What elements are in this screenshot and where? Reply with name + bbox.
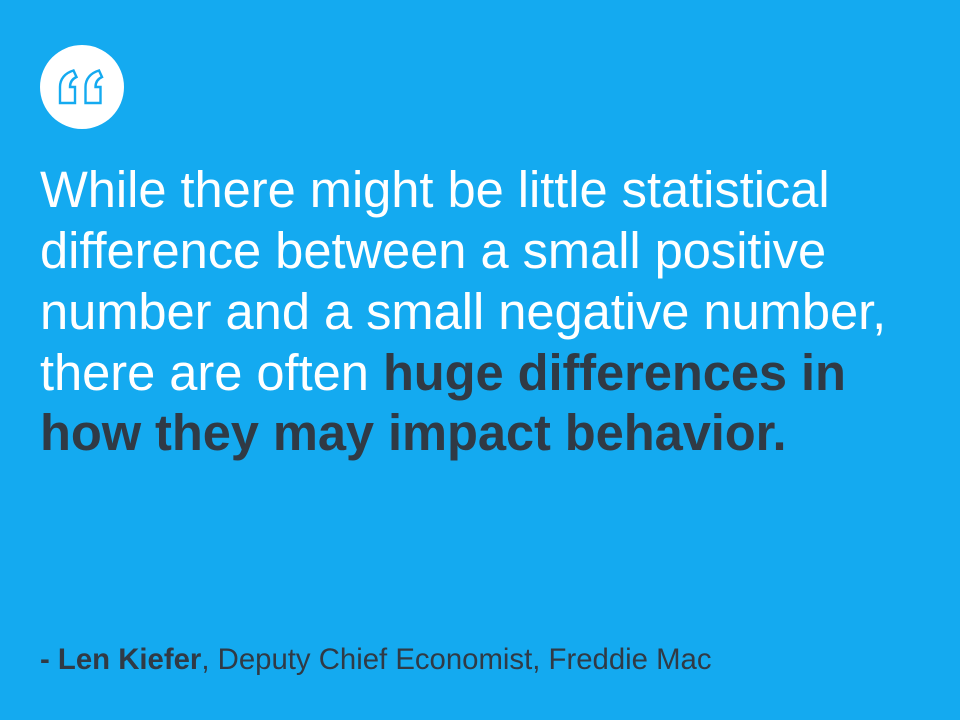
quote text: how they may impact behavior. — [40, 404, 786, 461]
quote text: there are often huge differences in — [40, 344, 846, 401]
quote text: difference between a small positive — [40, 222, 826, 279]
icon: quotation mark badge — [40, 45, 124, 129]
quote text: number and a small negative number, — [40, 283, 886, 340]
attribution: - Len Kiefer, Deputy Chief Economist, Freddie Mac — [40, 643, 712, 676]
quote text — [40, 161, 886, 461]
quote text: While there might be little statistical — [40, 161, 830, 218]
